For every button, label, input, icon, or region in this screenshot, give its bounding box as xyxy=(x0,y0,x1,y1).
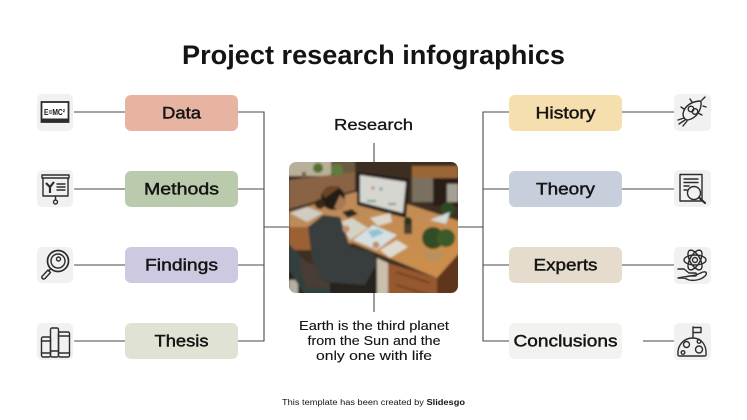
connector: right bracket xyxy=(458,112,509,341)
panel: right icon connectors xyxy=(622,112,674,341)
pill: Conclusions xyxy=(509,323,622,359)
pill: Experts: Experts xyxy=(534,256,598,274)
pill: Findings xyxy=(125,247,238,283)
icon: books xyxy=(37,323,73,360)
pill: History: History xyxy=(536,104,596,122)
pill: History xyxy=(509,95,622,131)
text block: description xyxy=(299,318,449,363)
pill: Thesis xyxy=(125,323,238,359)
icon: moon with flag xyxy=(674,323,711,360)
icon: presentation board xyxy=(37,170,73,207)
photo: researcher at desk xyxy=(289,162,458,293)
footer credit: This template has been created by Slidesgo xyxy=(282,398,465,407)
pill: Conclusions: Conclusions xyxy=(514,332,618,350)
icon: document search xyxy=(674,170,711,207)
connector: research to photo xyxy=(373,143,375,162)
heading: Research: Research xyxy=(334,117,413,134)
pill: Theory: Theory xyxy=(536,180,596,198)
icon: magnifying glass xyxy=(37,247,73,283)
pill: Methods: Methods xyxy=(144,180,219,198)
text block: description: Earth is the third planet xyxy=(299,318,449,333)
pill: Theory xyxy=(509,171,622,207)
connector: left bracket xyxy=(238,112,289,341)
pill: Methods xyxy=(125,171,238,207)
text block: description: from the Sun and the xyxy=(308,333,440,348)
icon: microbe xyxy=(674,94,711,131)
pill: Thesis: Thesis xyxy=(154,332,208,350)
connector: photo to description xyxy=(373,293,375,312)
pill: Findings: Findings xyxy=(145,256,218,274)
panel: left icon connectors xyxy=(74,112,125,341)
icon: blackboard formula: E=MC² xyxy=(44,108,65,117)
text block: description: only one with life xyxy=(316,348,432,363)
icon: blackboard formula xyxy=(37,94,73,131)
title: Project research infographics xyxy=(182,40,565,70)
pill: Data: Data xyxy=(162,104,202,122)
pill: Experts xyxy=(509,247,622,283)
pill: Data xyxy=(125,95,238,131)
icon: atom in hand xyxy=(674,247,711,284)
